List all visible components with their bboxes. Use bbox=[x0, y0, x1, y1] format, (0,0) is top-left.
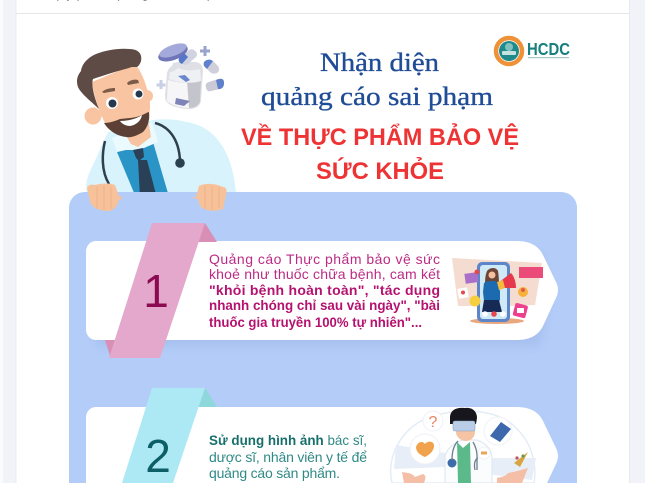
stethoscope bbox=[103, 141, 109, 184]
title: Nhận diện bbox=[320, 48, 439, 77]
icon: pill jar bbox=[156, 40, 224, 109]
ribbon 2 fold bbox=[197, 388, 217, 407]
face bbox=[92, 64, 150, 133]
ribbon 1 folds bbox=[105, 223, 217, 356]
text block 1: thuốc gia truyền 100% tự nhiên"... bbox=[209, 314, 422, 330]
panel: item 2 bbox=[86, 388, 558, 483]
coat bbox=[445, 440, 492, 483]
illustration: phone influencer bbox=[452, 258, 543, 324]
ears bbox=[84, 108, 102, 124]
ribbon 2 bbox=[122, 388, 205, 483]
logo: HCDC bbox=[496, 38, 570, 64]
text block 1: nhanh chóng chỉ sau vài ngày", "bài bbox=[209, 297, 440, 313]
card 2 shape bbox=[86, 407, 558, 483]
panel: blue background bbox=[69, 192, 577, 483]
eyes bbox=[106, 97, 118, 109]
text block 2: quảng cáo sản phẩm. bbox=[209, 465, 340, 481]
title bbox=[241, 48, 519, 185]
ribbon 1 bbox=[109, 223, 205, 358]
title: SỨC KHỎE bbox=[316, 156, 444, 185]
number 1: 1 bbox=[143, 265, 169, 317]
pills bbox=[181, 49, 197, 65]
text block 2: dược sĩ, nhân viên y tế để bbox=[209, 449, 367, 465]
beard bbox=[104, 112, 149, 137]
text block 2 bbox=[209, 432, 367, 481]
text block 2: Sử dụng hình ảnh bác sĩ, bbox=[209, 432, 367, 448]
colored pills bbox=[514, 452, 528, 467]
bubbles bbox=[423, 411, 443, 431]
collar bbox=[112, 122, 158, 152]
hair bbox=[77, 49, 141, 109]
neck bbox=[120, 119, 151, 147]
megaphone bbox=[498, 273, 516, 288]
hands bbox=[402, 472, 425, 483]
logo: HCDC: HCDC bbox=[527, 39, 570, 59]
illustration: doctor bbox=[77, 49, 236, 200]
jar lid bbox=[156, 41, 190, 65]
smile bbox=[120, 115, 142, 126]
title: VỀ THỰC PHẨM BẢO VỆ bbox=[241, 122, 519, 151]
panel: item 1 bbox=[86, 223, 558, 358]
head bbox=[456, 420, 475, 441]
eyebrows bbox=[102, 88, 115, 93]
title: quảng cáo sai phạm bbox=[261, 82, 493, 111]
text block 1: Quảng cáo Thực phẩm bảo vệ sức bbox=[209, 251, 440, 267]
hands over panel edge bbox=[87, 184, 227, 211]
text block 1: khoẻ như thuốc chữa bệnh, cam kết bbox=[209, 266, 440, 282]
woman bbox=[485, 268, 499, 287]
vest bbox=[117, 142, 170, 200]
number 2: 2 bbox=[145, 430, 171, 482]
illustration: doctor with products: ? bbox=[429, 414, 438, 431]
illustration: doctor with products bbox=[391, 408, 536, 483]
jar body bbox=[165, 62, 203, 109]
text block 1 bbox=[209, 251, 440, 330]
text block 1: "khỏi bệnh hoàn toàn", "tác dụng bbox=[209, 282, 440, 298]
card 1 shape bbox=[86, 241, 558, 340]
tie bbox=[133, 148, 157, 198]
coat bbox=[86, 119, 236, 195]
